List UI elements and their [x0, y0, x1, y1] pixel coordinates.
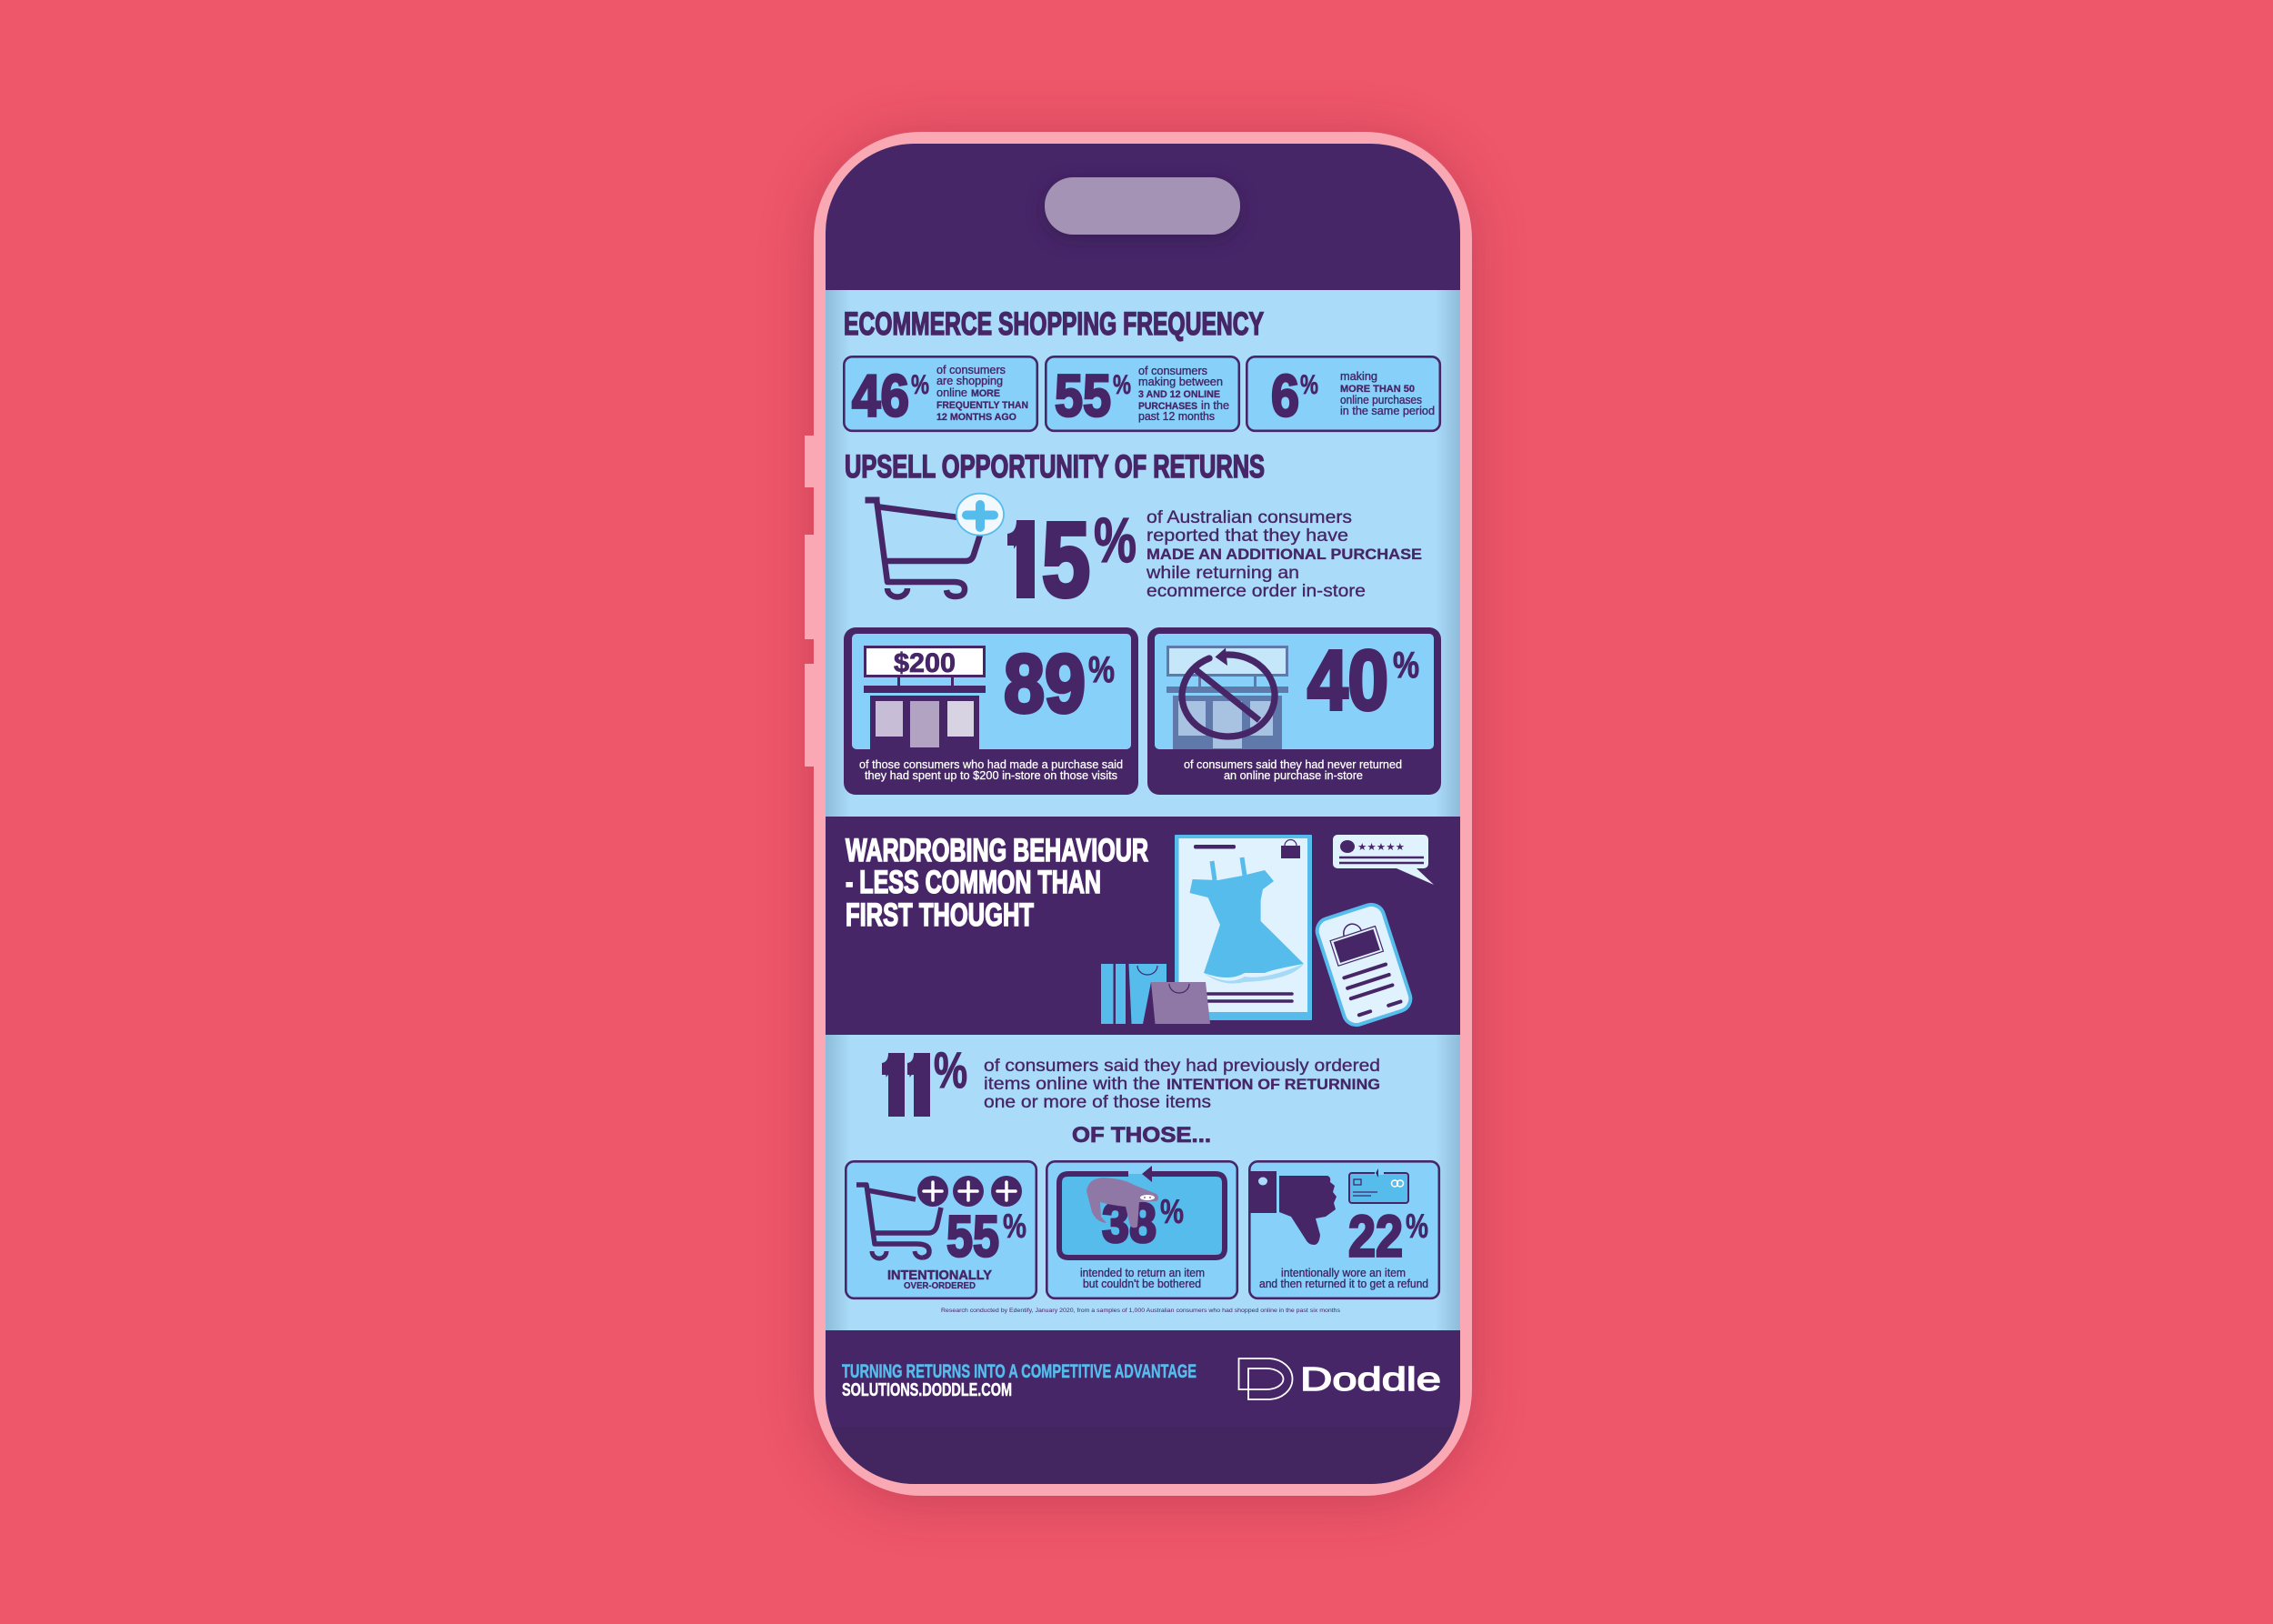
caption: of consumers said they had never returned — [1184, 757, 1402, 771]
stat card: 6%: 6 — [1271, 362, 1299, 429]
stat: 15% — [1007, 516, 1136, 599]
stat: 15%: % — [1094, 505, 1136, 576]
subheading: of those: OF THOSE... — [1072, 1123, 1211, 1148]
caption: they had spent up to $200 in-store on those visits — [865, 768, 1117, 782]
caption: of those consumers who had made a purchase said — [859, 757, 1123, 771]
number: 22%: % — [1406, 1208, 1428, 1245]
icon: cart with three plus signs — [856, 1176, 1022, 1258]
icon: credit card refund — [1349, 1168, 1408, 1203]
tagline: TURNING RETURNS INTO A COMPETITIVE ADVANTAGE — [842, 1361, 1197, 1382]
phone frame — [805, 132, 1472, 1496]
stat: 89%: % — [1088, 648, 1115, 690]
caption: INTENTIONALLY — [887, 1268, 992, 1283]
stat card: 46%: MORE — [971, 388, 1000, 399]
section: upsell opportunity of returns — [844, 449, 1441, 795]
caption: OVER-ORDERED — [904, 1280, 976, 1291]
icon: return screen with arrow — [1059, 1166, 1225, 1258]
stat card: 46%: of consumers — [936, 364, 1006, 376]
stat card: 55% — [1046, 356, 1239, 431]
stat card: 46%: online — [936, 386, 967, 399]
stat: 89%: 89 — [1004, 638, 1086, 730]
heading: wardrobing behaviour — [846, 833, 1148, 933]
heading: wardrobing behaviour: - LESS COMMON THAN — [846, 865, 1101, 900]
stat card: 6%: making — [1340, 370, 1377, 383]
illustration: review speech bubble — [1333, 835, 1434, 885]
top bar — [826, 144, 1460, 290]
heading: upsell opportunity: UPSELL OPPORTUNITY OF RETURNS — [845, 449, 1265, 485]
stat: 40%: % — [1393, 644, 1419, 686]
caption — [859, 757, 1123, 782]
heading: wardrobing behaviour: WARDROBING BEHAVIOUR — [846, 833, 1148, 868]
text: additional purchase: MADE AN ADDITIONAL PURCHASE — [1147, 546, 1422, 563]
stat card: 46% — [844, 356, 1037, 431]
purple band: wardrobing — [826, 817, 1460, 1035]
stat card: 46%: FREQUENTLY THAN — [936, 400, 1028, 411]
number: 38%: % — [1160, 1193, 1184, 1230]
stat card: 46%: % — [911, 370, 929, 400]
stat card: 46%: 12 MONTHS AGO — [936, 412, 1016, 423]
caption — [1184, 757, 1402, 782]
caption: an online purchase in-store — [1224, 768, 1363, 782]
logo: Doddle — [1238, 1358, 1441, 1399]
card: 38% couldn't be bothered — [1046, 1161, 1237, 1298]
icon: store with $200 sign — [864, 647, 986, 749]
icon: thumbs down — [1249, 1171, 1337, 1245]
stat card: 6%: online purchases — [1340, 394, 1422, 406]
notch — [1045, 177, 1240, 235]
stat card: 6%: % — [1300, 370, 1318, 400]
illustration: dress on screen — [1175, 835, 1312, 1020]
illustration: review speech bubble: ★★★★★ — [1357, 841, 1405, 853]
stat: 15%: 1 — [1011, 500, 1038, 618]
number: 55%: 55 — [946, 1204, 999, 1269]
stat: 11% intention of returning — [882, 1051, 1380, 1117]
panel: 40% never returned in-store — [1147, 627, 1441, 795]
heading: ecommerce shopping frequency: ECOMMERCE SHOPPING FREQUENCY — [844, 306, 1264, 342]
number: 11% — [882, 1051, 967, 1117]
text: previously ordered — [984, 1056, 1380, 1112]
stat card: 55%: % — [1113, 370, 1131, 400]
stat: 40%: 40 — [1307, 633, 1388, 727]
section: ecommerce shopping frequency — [844, 306, 1440, 431]
stat card: 6%: MORE THAN 50 — [1340, 384, 1415, 395]
stat card: 55%: past 12 months — [1138, 410, 1215, 423]
text: additional purchase — [1146, 507, 1422, 601]
text: previously ordered: items online with the — [984, 1074, 1160, 1094]
tagline: SOLUTIONS.DODDLE.COM — [842, 1379, 1012, 1400]
stat card: 55%: of consumers — [1138, 365, 1207, 377]
caption — [1080, 1267, 1205, 1290]
stat card: 6% — [1247, 356, 1440, 431]
caption: and then returned it to get a refund — [1259, 1278, 1428, 1290]
section: wardrobing behaviour — [846, 833, 1434, 1028]
footer — [842, 1358, 1441, 1400]
number: 38%: 38 — [1102, 1192, 1157, 1254]
caption — [1259, 1267, 1428, 1290]
caption: intended to return an item — [1080, 1267, 1205, 1279]
tagline — [842, 1361, 1197, 1400]
footnote: Research conducted by Edentify, January 2020, from a samples of 1,000 Australian consumers who had shopped online in the past six months — [941, 1308, 1341, 1314]
text: additional purchase: while returning an — [1146, 563, 1299, 583]
text: additional purchase: of Australian consumers — [1147, 507, 1352, 527]
card: 22% wore and returned — [1249, 1161, 1439, 1298]
stat card: 55%: 3 AND 12 ONLINE — [1138, 389, 1220, 400]
stat: 15%: 5 — [1042, 500, 1090, 618]
heading: wardrobing behaviour: FIRST THOUGHT — [846, 897, 1034, 933]
logo: Doddle: Doddle — [1300, 1360, 1441, 1398]
stat card: 55%: PURCHASES — [1138, 401, 1197, 412]
illustration: mobile phone with bag — [1314, 901, 1414, 1028]
caption — [887, 1268, 992, 1291]
text: additional purchase: reported that they have — [1147, 526, 1348, 546]
stat card: 6%: in the same period — [1340, 405, 1435, 417]
caption: intentionally wore an item — [1281, 1267, 1406, 1279]
stat card: 55%: in the — [1201, 399, 1229, 412]
text: previously ordered: of consumers said they had previously ordered — [984, 1056, 1380, 1076]
card: 55% intentionally over-ordered — [846, 1161, 1036, 1298]
number: 22%: 22 — [1348, 1204, 1403, 1269]
stat card: 46%: are shopping — [936, 375, 1003, 387]
illustration: shopping bags — [1101, 964, 1210, 1024]
text: additional purchase: ecommerce order in-store — [1147, 581, 1366, 601]
purple footer band — [826, 1330, 1460, 1484]
number: 11%: 11 — [884, 1038, 934, 1135]
number: 55%: % — [1003, 1208, 1026, 1245]
phone screen — [826, 144, 1460, 1484]
icon: faded store with no-return symbol — [1167, 647, 1288, 749]
stat card: 55%: 55 — [1055, 362, 1111, 429]
stat card: 55%: making between — [1138, 376, 1223, 388]
icon: store with $200 sign: $200 — [894, 648, 956, 678]
icon: shopping cart with plus — [866, 494, 1004, 596]
stat card: 46%: 46 — [852, 362, 909, 429]
caption: but couldn't be bothered — [1083, 1278, 1201, 1290]
number: 11%: % — [934, 1041, 967, 1098]
icon: sloth — [1086, 1178, 1158, 1228]
text: previously ordered: INTENTION OF RETURNING — [1167, 1076, 1380, 1093]
text: previously ordered: one or more of those items — [984, 1092, 1211, 1112]
panel: 89% spent up to $200 — [844, 627, 1138, 795]
